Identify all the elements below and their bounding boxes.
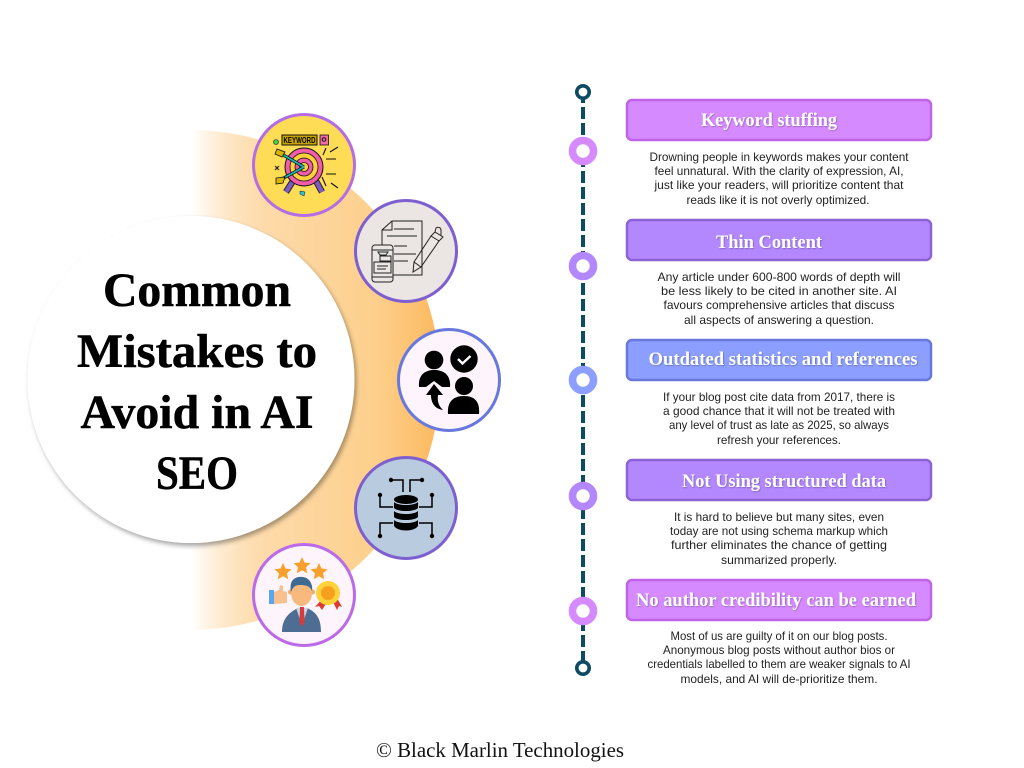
panel: thin content: Thin Content xyxy=(716,232,823,253)
text: keyword stuffing description: feel unnatural. With the clarity of expression, AI, xyxy=(654,164,904,178)
text: thin content description: Any article under 600-800 words of depth will xyxy=(658,270,900,284)
panel: author credibility: No author credibility can be earned xyxy=(636,590,916,611)
text: structured data description: today are not using schema markup which xyxy=(670,524,888,538)
text: outdated statistics description: a good chance that it will not be treated with xyxy=(663,404,895,418)
text: author credibility description xyxy=(648,629,910,686)
text: thin content description: favours comprehensive articles that discuss xyxy=(664,298,895,312)
text: thin content description: all aspects of answering a question. xyxy=(684,313,874,327)
title circle xyxy=(28,216,354,543)
panel: thin content xyxy=(627,220,931,327)
text: outdated statistics description: If your blog post cite data from 2017, there is xyxy=(663,390,895,404)
text: author credibility description: Anonymous blog posts without author bios or xyxy=(663,643,895,657)
panel: structured data: Not Using structured data xyxy=(682,471,886,492)
text: author credibility description: credentials labelled to them are weaker signals to AI xyxy=(648,657,910,671)
icon: people with check xyxy=(398,330,500,430)
icon: document and pen xyxy=(356,200,456,302)
panel: outdated statistics: Outdated statistics and references xyxy=(648,349,918,370)
text: author credibility description: Most of us are guilty of it on our blog posts. xyxy=(670,629,888,643)
panel: author credibility xyxy=(627,580,931,686)
text: structured data description: summarized properly. xyxy=(721,553,837,567)
title: Avoid in AI xyxy=(80,386,314,439)
text: author credibility description: models, and AI will de-prioritize them. xyxy=(680,672,878,686)
panel: keyword stuffing: Keyword stuffing xyxy=(701,110,837,131)
timeline xyxy=(572,86,594,674)
text: outdated statistics description: refresh your references. xyxy=(717,433,841,447)
text: keyword stuffing description: just like your readers, will prioritize content that xyxy=(653,178,904,192)
title: SEO xyxy=(156,447,238,500)
text: structured data description xyxy=(670,510,888,567)
title xyxy=(77,264,317,500)
panel: structured data xyxy=(627,460,931,567)
text: keyword stuffing description: reads like it is not overly optimized. xyxy=(686,193,870,207)
text: structured data description: further eliminates the chance of getting xyxy=(671,538,887,552)
icon: keyword target: KEYWORD xyxy=(284,136,316,145)
title: Common xyxy=(103,264,291,317)
text: outdated statistics description: any level of trust as late as 2025, so always xyxy=(669,418,889,432)
icon: keyword target xyxy=(254,114,354,216)
text: structured data description: It is hard to believe but many sites, even xyxy=(674,510,884,524)
text: thin content description: be less likely to be cited in another site. AI xyxy=(661,284,897,298)
title: Mistakes to xyxy=(77,325,317,378)
panel: outdated statistics xyxy=(627,340,931,447)
footer credit: © Black Marlin Technologies xyxy=(376,738,624,762)
text: outdated statistics description xyxy=(663,390,895,447)
orange half ring xyxy=(190,130,440,630)
icon: database network xyxy=(356,458,456,558)
text: thin content description xyxy=(658,270,900,327)
text: keyword stuffing description: Drowning people in keywords makes your content xyxy=(650,150,909,164)
panel: keyword stuffing xyxy=(627,100,931,207)
icon: credible author xyxy=(254,544,354,646)
text: keyword stuffing description xyxy=(650,150,909,207)
